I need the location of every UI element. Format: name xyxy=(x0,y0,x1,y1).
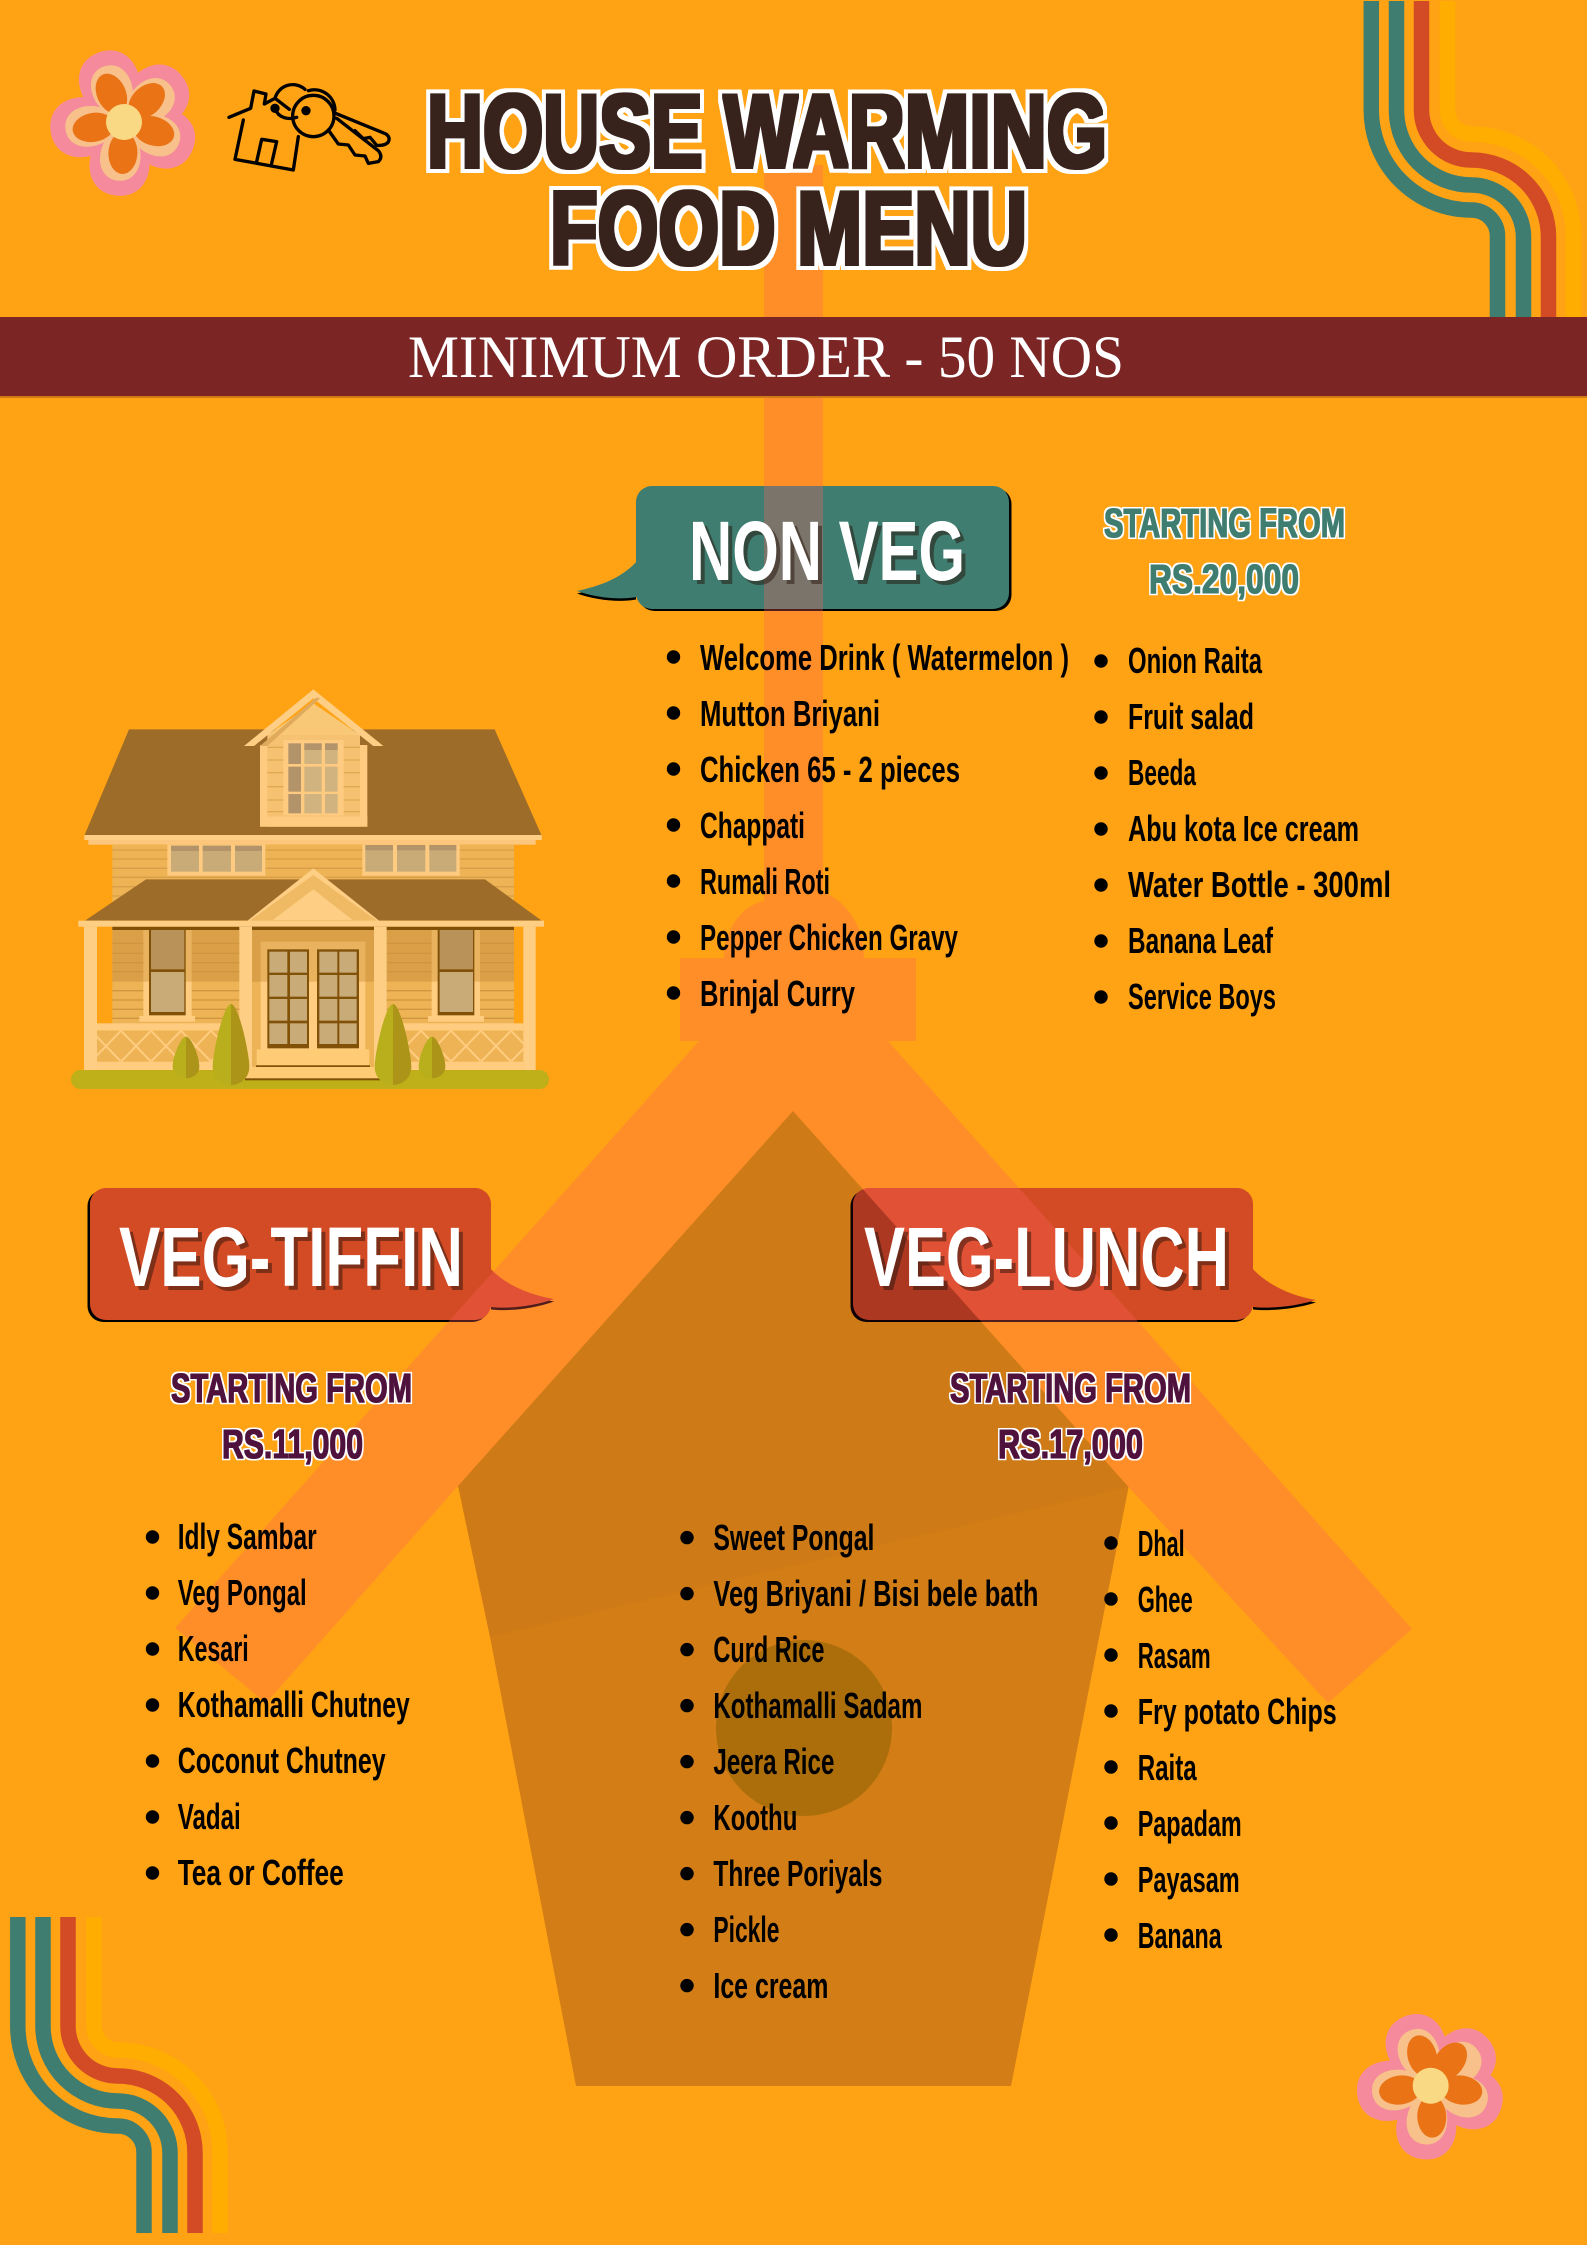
banner: minimum order xyxy=(0,317,1587,398)
list: non veg right column: Banana Leaf xyxy=(1128,920,1274,961)
list: veg tiffin: Idly Sambar xyxy=(178,1516,317,1557)
columns xyxy=(84,927,536,1070)
list: veg tiffin: Vadai xyxy=(178,1796,241,1837)
bushes xyxy=(173,1037,186,1078)
list: veg lunch right column: Ghee xyxy=(1138,1579,1193,1620)
list: veg lunch right column: Payasam xyxy=(1138,1859,1240,1900)
list: veg lunch right column: Banana xyxy=(1138,1915,1222,1956)
list: veg lunch right column: Papadam xyxy=(1138,1803,1242,1844)
list: non veg left column: Rumali Roti xyxy=(700,861,830,902)
price: veg lunch: RS.17,000 xyxy=(998,1421,1143,1467)
list: non veg left column: Welcome Drink ( Watermelon ) xyxy=(700,637,1069,678)
list: veg lunch left column xyxy=(680,1517,1038,2006)
illustration: house xyxy=(71,689,549,1089)
list: non veg left column: Chicken 65 - 2 pieces xyxy=(700,749,960,790)
decorative stripes: top right xyxy=(1371,1,1574,317)
list: veg tiffin: Kothamalli Chutney xyxy=(178,1684,410,1725)
list: veg lunch right column: Dhal xyxy=(1138,1523,1185,1564)
main roof xyxy=(84,729,542,836)
list: non veg right column: Abu kota Ice cream xyxy=(1128,808,1359,849)
watermark: house body xyxy=(458,1111,1129,2086)
badge shape: veg tiffin xyxy=(88,1188,554,1322)
badge label: veg lunch: VEG-LUNCH xyxy=(864,1210,1229,1304)
price: non veg: STARTING FROM xyxy=(1104,500,1345,546)
list: veg lunch left column: Sweet Pongal xyxy=(713,1517,874,1558)
title: FOOD MENU xyxy=(550,171,1027,287)
badge label: veg tiffin: VEG-TIFFIN xyxy=(119,1210,463,1304)
list: non veg right column xyxy=(1094,640,1391,1017)
porch roof xyxy=(85,879,542,921)
list: veg lunch left column: Ice cream xyxy=(713,1965,828,2006)
price: veg tiffin xyxy=(171,1365,412,1467)
decorative stripes: bottom left xyxy=(18,1917,220,2233)
title xyxy=(427,74,1107,287)
list: non veg right column: Fruit salad xyxy=(1128,696,1254,737)
list: veg tiffin: Tea or Coffee xyxy=(178,1852,344,1893)
price: veg lunch xyxy=(950,1365,1191,1467)
list: veg lunch left column: Veg Briyani / Bisi bele bath xyxy=(713,1573,1038,1614)
list: non veg left column: Mutton Briyani xyxy=(700,693,880,734)
porch railing xyxy=(97,1023,239,1031)
list: veg lunch right column: Raita xyxy=(1138,1747,1197,1788)
list: veg lunch left column: Pickle xyxy=(713,1909,779,1950)
list: veg tiffin: Coconut Chutney xyxy=(178,1740,386,1781)
list: non veg left column: Brinjal Curry xyxy=(700,973,855,1014)
price: non veg: RS.20,000 xyxy=(1149,556,1299,602)
price: non veg xyxy=(1104,500,1345,602)
lawn xyxy=(71,1070,549,1089)
list: non veg right column: Onion Raita xyxy=(1128,640,1263,681)
title: HOUSE WARMING xyxy=(427,74,1107,190)
list: veg tiffin: Veg Pongal xyxy=(178,1572,307,1613)
price: veg tiffin: RS.11,000 xyxy=(222,1421,363,1467)
list: non veg left column xyxy=(667,637,1069,1014)
list: non veg right column: Service Boys xyxy=(1128,976,1276,1017)
list: veg lunch left column: Three Poriyals xyxy=(713,1853,882,1894)
list: veg tiffin: Kesari xyxy=(178,1628,249,1669)
watermark: house roof and chimney xyxy=(175,165,1412,1703)
list: veg lunch right column: Rasam xyxy=(1138,1635,1211,1676)
door xyxy=(252,930,374,1070)
list: veg lunch left column: Kothamalli Sadam xyxy=(713,1685,922,1726)
lower wall xyxy=(112,927,514,1027)
icon: flower top left xyxy=(47,42,204,199)
list: veg tiffin xyxy=(146,1516,410,1893)
list: non veg right column: Beeda xyxy=(1128,752,1197,793)
icon: flower bottom right xyxy=(1354,2006,1510,2162)
list: veg lunch right column: Fry potato Chips xyxy=(1138,1691,1337,1732)
icon: house with keys xyxy=(229,85,389,170)
list: veg lunch left column: Curd Rice xyxy=(713,1629,824,1670)
badge label: non veg: NON VEG xyxy=(689,504,965,598)
badge shape: veg lunch xyxy=(850,1188,1316,1322)
list: veg lunch left column: Koothu xyxy=(713,1797,797,1838)
list: non veg right column: Water Bottle - 300ml xyxy=(1128,864,1391,905)
lower windows xyxy=(143,930,192,982)
list: non veg left column: Chappati xyxy=(700,805,805,846)
price: veg lunch: STARTING FROM xyxy=(950,1365,1191,1411)
banner text: MINIMUM ORDER - 50 NOS xyxy=(408,324,1124,390)
list: veg lunch left column: Jeera Rice xyxy=(713,1741,834,1782)
watermark: house window circle xyxy=(716,1640,892,1816)
list: veg lunch right column xyxy=(1104,1523,1337,1956)
badge shape: non veg xyxy=(577,486,1012,611)
list: non veg left column: Pepper Chicken Gravy xyxy=(700,917,958,958)
price: veg tiffin: STARTING FROM xyxy=(171,1365,412,1411)
